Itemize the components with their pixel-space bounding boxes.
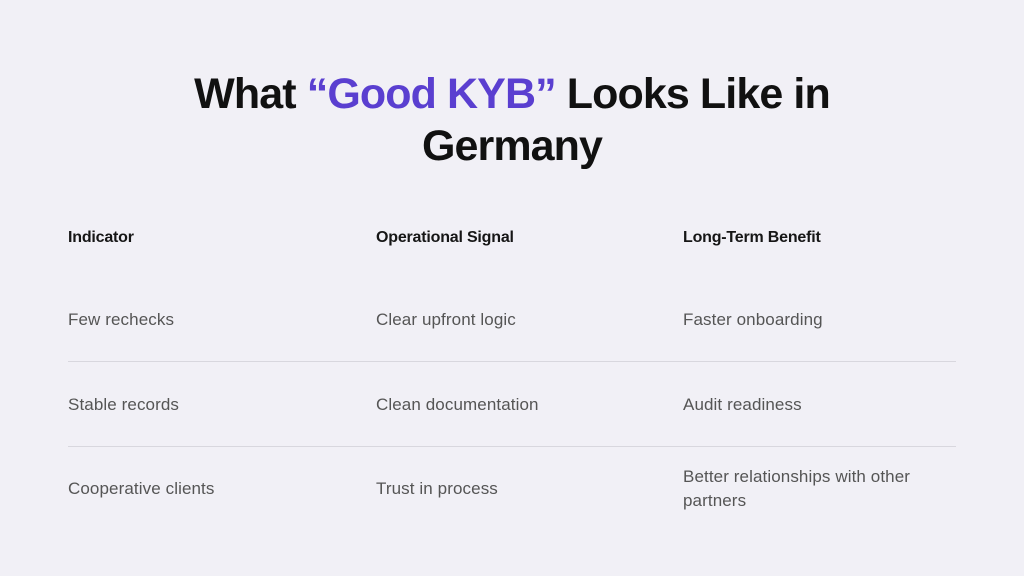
title <box>194 70 830 170</box>
title: Germany <box>422 122 602 170</box>
row 3: Cooperative clients <box>68 479 214 498</box>
row 2: Audit readiness <box>683 395 802 414</box>
header: long-term benefit: Long-Term Benefit <box>683 229 821 246</box>
row 1: Few rechecks <box>68 310 174 329</box>
header: indicator: Indicator <box>68 229 134 246</box>
title: What “Good KYB” Looks Like in <box>194 70 830 118</box>
row 2 <box>68 395 802 414</box>
row 2: Clean documentation <box>376 395 539 414</box>
header: operational signal: Operational Signal <box>376 229 514 246</box>
row 2: Stable records <box>68 395 179 414</box>
row 1: Clear upfront logic <box>376 310 516 329</box>
row 3: Better relationships with other partners <box>683 467 910 510</box>
row 1: Faster onboarding <box>683 310 823 329</box>
row 1 <box>68 310 823 329</box>
row 3 <box>68 467 910 510</box>
row 3: Trust in process <box>376 479 498 498</box>
